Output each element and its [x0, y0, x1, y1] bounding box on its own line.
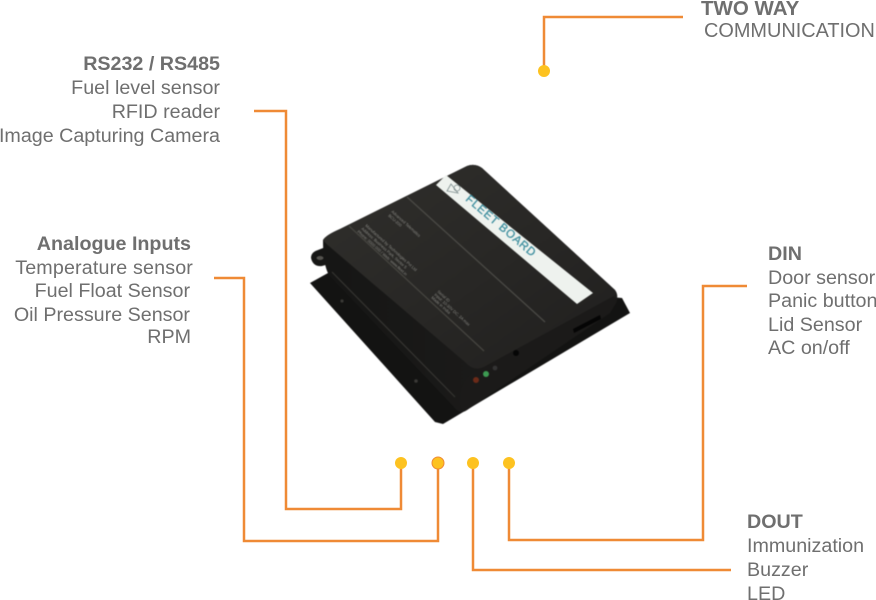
front port	[513, 350, 519, 356]
text: DOUT	[747, 511, 864, 600]
printed device text: Manufactured by Technologies Pvt Ltd	[364, 223, 418, 272]
label logo icon	[447, 184, 460, 193]
text: RS232 / RS485: Image Capturing Camera	[0, 125, 220, 147]
SIM slot	[573, 315, 601, 333]
printed device text: Serial ID	[436, 289, 451, 303]
text: analogue inputs: RPM	[147, 326, 191, 348]
printed device text: Phone: 0000 000 / Web: www.fleet.in	[356, 229, 408, 277]
ridge lines	[407, 197, 545, 322]
printed device text: Made in India	[430, 295, 452, 315]
LED indicators	[473, 366, 497, 383]
text: DOUT: DOUT	[747, 511, 803, 533]
screws	[340, 299, 418, 383]
connector: DIN	[503, 286, 747, 540]
text: two way communication	[701, 0, 875, 42]
text: RS232 / RS485: Fuel level sensor	[71, 77, 220, 99]
top face	[323, 165, 616, 369]
text: RS232 / RS485: RFID reader	[112, 101, 220, 123]
text: analogue inputs: Oil Pressure Sensor	[14, 304, 190, 326]
text: DIN: Panic button	[768, 290, 876, 312]
text: analogue inputs	[14, 233, 193, 348]
connector: two way communication	[538, 17, 683, 77]
text: DIN: DIN	[768, 243, 802, 265]
text: analogue inputs: Fuel Float Sensor	[35, 280, 190, 302]
text: RS232 / RS485: RS232 / RS485	[83, 53, 220, 75]
front face	[460, 297, 616, 411]
printed device text: Advanced Telematics	[390, 209, 422, 238]
text: DIN: Door sensor	[768, 267, 875, 289]
mounting tab	[311, 245, 336, 266]
text: DOUT: Buzzer	[747, 559, 808, 581]
connector: analogue inputs	[214, 278, 444, 541]
text: DIN: Lid Sensor	[768, 314, 862, 336]
label brand text: FLEET BOARD	[463, 193, 538, 260]
text: two way communication: COMMUNICATION	[704, 20, 875, 42]
device photo	[310, 165, 630, 424]
text: analogue inputs: Analogue Inputs	[37, 233, 191, 255]
text: DIN	[768, 243, 876, 359]
text: DIN: AC on/off	[768, 337, 850, 359]
printed device text: Address: Business Park, Sector 5	[360, 226, 409, 270]
connector: DOUT	[467, 457, 731, 570]
printed device text	[356, 209, 471, 327]
text: DOUT: Immunization	[747, 535, 864, 557]
printed device text: Input: 10-30V DC, 2A max	[433, 292, 471, 327]
mounting flange	[310, 273, 630, 424]
white label	[436, 175, 593, 304]
text: RS232 / RS485	[0, 53, 220, 147]
connector: RS232 / RS485	[254, 111, 407, 509]
printed device text: BCU-200	[387, 213, 403, 228]
text: analogue inputs: Temperature sensor	[15, 257, 193, 279]
device body	[323, 165, 617, 412]
